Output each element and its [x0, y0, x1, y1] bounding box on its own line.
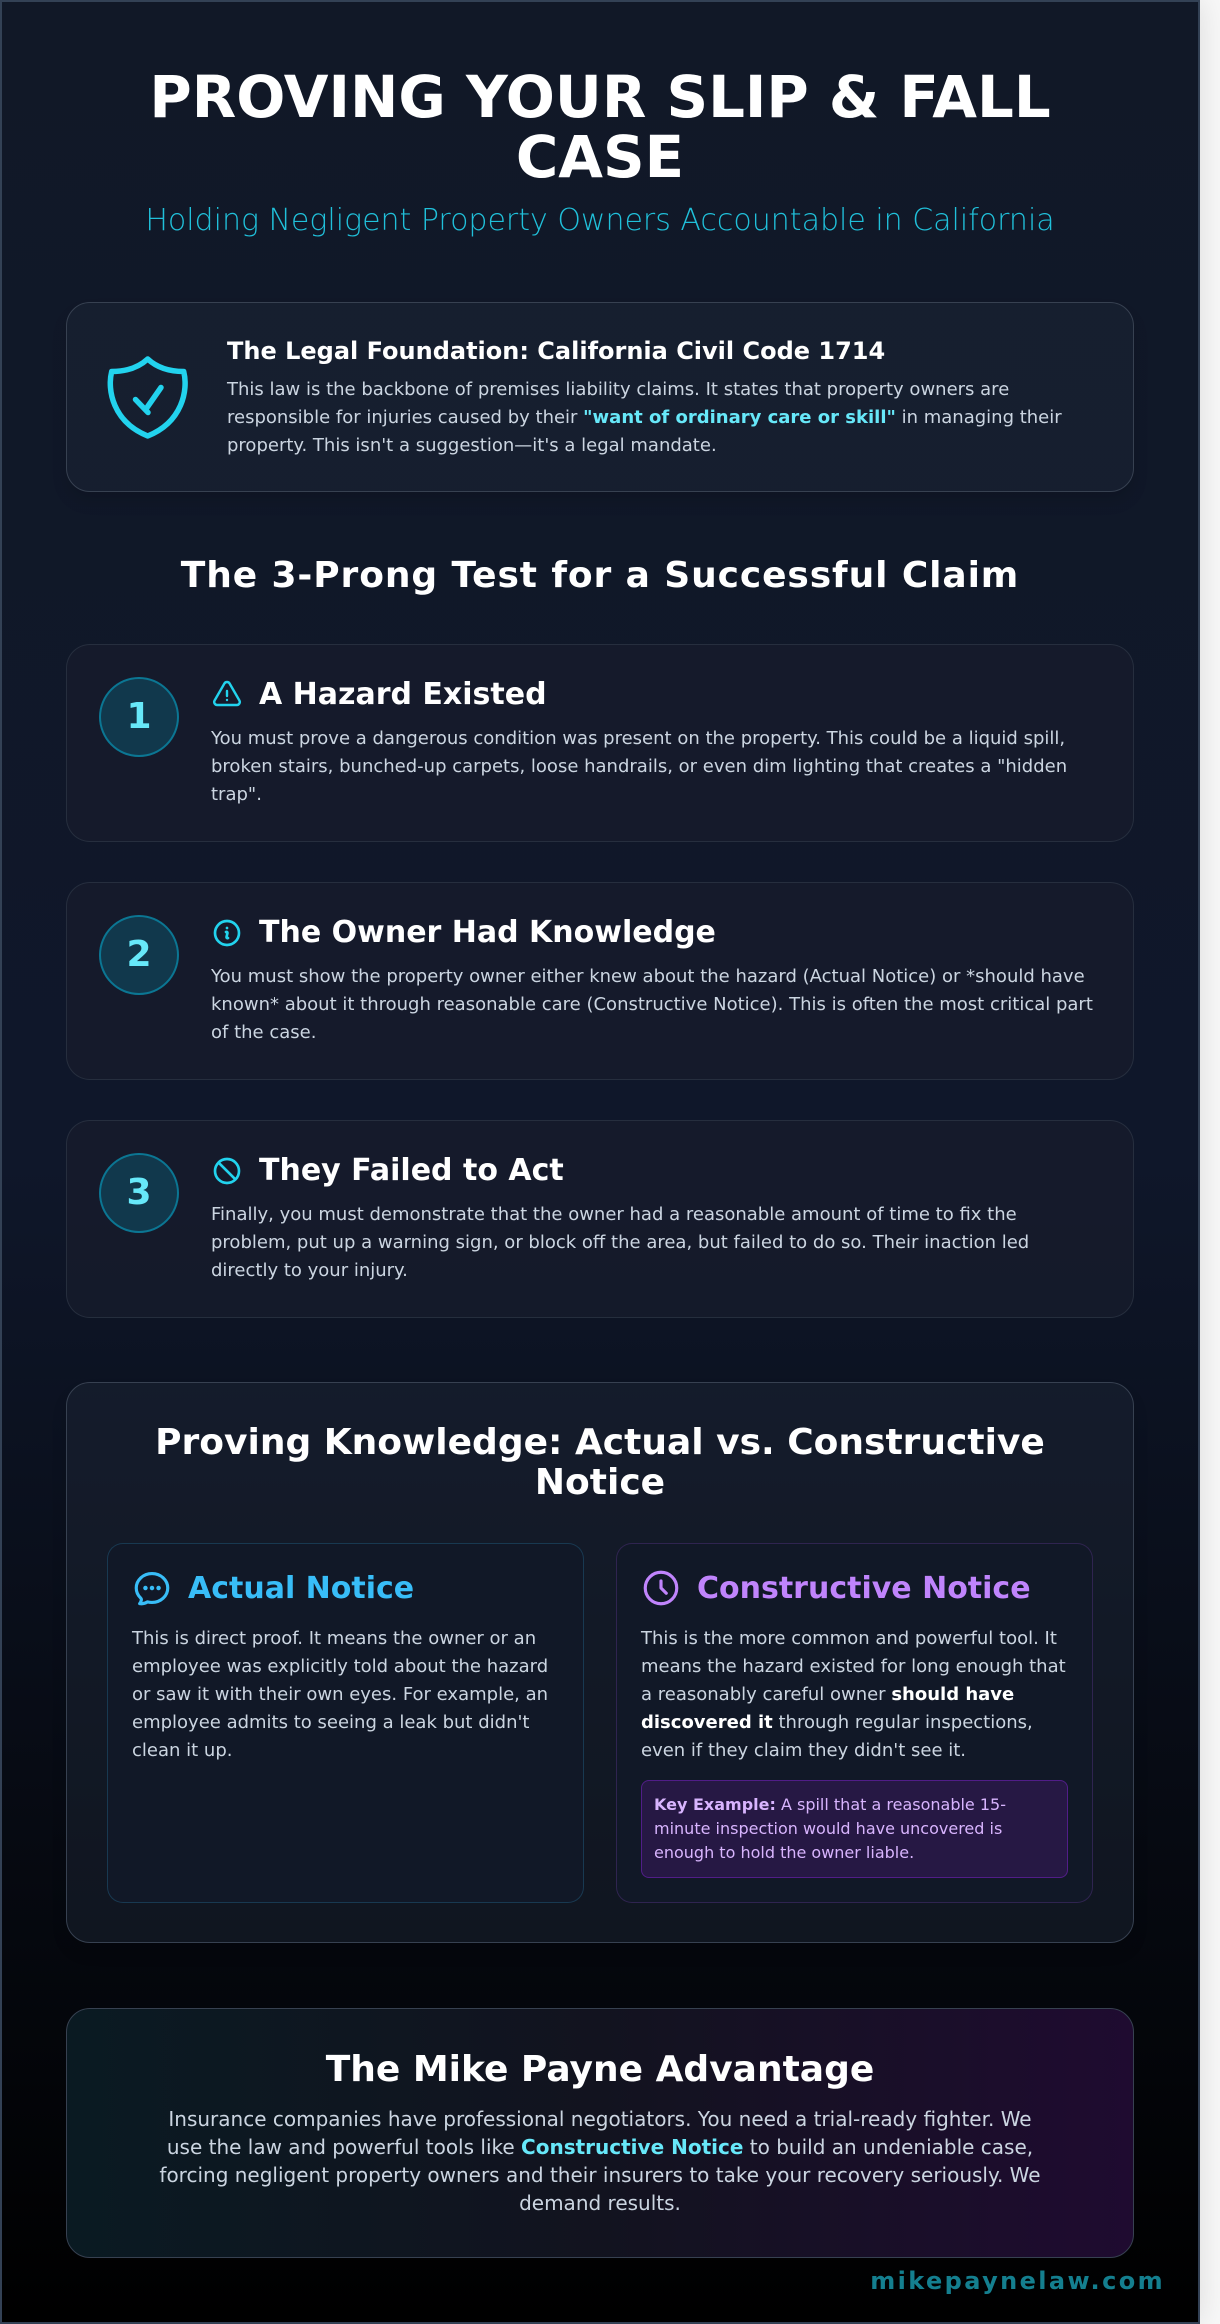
callout: key example [641, 1780, 1068, 1878]
actual notice heading: Actual Notice [188, 1571, 414, 1606]
legal foundation text: This law is the backbone of premises liability claims. It states that property owners are responsible for injuries caused by their "want of ordinary care or skill" in managing their property. This isn't a suggestion—it's a legal mandate. [227, 379, 1062, 456]
proving knowledge heading: Proving Knowledge: Actual vs. Constructive Notice [155, 1422, 1045, 1503]
step number 3: 3 [126, 1172, 152, 1213]
advantage text: Insurance companies have professional negotiators. You need a trial-ready fighter. We use the law and powerful tools like Constructive Notice to build an undeniable case, forcing negligent property owners and their insurers to take your recovery seriously. We demand results. [159, 2107, 1041, 2215]
panel: the mike payne advantage [66, 2008, 1134, 2258]
icon: warning triangle [213, 680, 241, 706]
subtitle: Holding Negligent Property Owners Accountable in California [145, 203, 1055, 238]
step 3 heading: They Failed to Act [259, 1153, 564, 1188]
legal foundation heading: The Legal Foundation: California Civil Code 1714 [227, 337, 885, 365]
step 2 text: You must show the property owner either knew about the hazard (Actual Notice) or *should have known* about it through reasonable care (Constructive Notice). This is often the most critical part of the case. [211, 966, 1093, 1043]
step 3 text: Finally, you must demonstrate that the owner had a reasonable amount of time to fix the problem, put up a warning sign, or block off the area, but failed to do so. Their inaction led directly to your injury. [211, 1204, 1029, 1281]
panel: proving knowledge [66, 1382, 1134, 1943]
icon: info circle [214, 920, 240, 946]
title: PROVING YOUR SLIP & FALL CASE [149, 63, 1051, 191]
icon: shield check [108, 356, 188, 439]
sub-panel: constructive notice [616, 1543, 1093, 1903]
step 1 text: You must prove a dangerous condition was present on the property. This could be a liquid spill, broken stairs, bunched-up carpets, loose handrails, or even dim lighting that creates a "hidden trap". [211, 728, 1067, 805]
panel: step 2 [66, 882, 1134, 1080]
step number 2: 2 [126, 934, 152, 975]
callout: key example: Key Example: A spill that a reasonable 15-minute inspection would have uncovered is enough to hold the owner liable. [654, 1795, 1006, 1862]
constructive notice heading: Constructive Notice [697, 1571, 1031, 1606]
icon: clock [644, 1570, 678, 1606]
panel: step 3 [66, 1120, 1134, 1318]
sub-panel: actual notice [107, 1543, 584, 1903]
step number 1 [99, 677, 179, 757]
panel: step 1 [66, 644, 1134, 842]
constructive notice text: This is the more common and powerful tool. It means the hazard existed for long enough that a reasonably careful owner should have discovered it through regular inspections, even if they claim they didn't see it. [641, 1628, 1066, 1761]
actual notice text: This is direct proof. It means the owner or an employee was explicitly told about the hazard or saw it with their own eyes. For example, an employee admits to seeing a leak but didn't clean it up. [132, 1628, 548, 1761]
section heading: 3-prong test: The 3-Prong Test for a Successful Claim [181, 555, 1019, 596]
icon: chat bubble [134, 1572, 170, 1606]
step 2 heading: The Owner Had Knowledge [259, 915, 716, 950]
website footer: mikepaynelaw.com [870, 2267, 1165, 2295]
icon: no symbol [214, 1158, 240, 1184]
step 1 heading: A Hazard Existed [259, 677, 547, 712]
step number 2 [99, 915, 179, 995]
advantage heading: The Mike Payne Advantage [326, 2049, 874, 2090]
panel: legal foundation [66, 302, 1134, 492]
step number 3 [99, 1153, 179, 1233]
step number 1: 1 [126, 696, 152, 737]
